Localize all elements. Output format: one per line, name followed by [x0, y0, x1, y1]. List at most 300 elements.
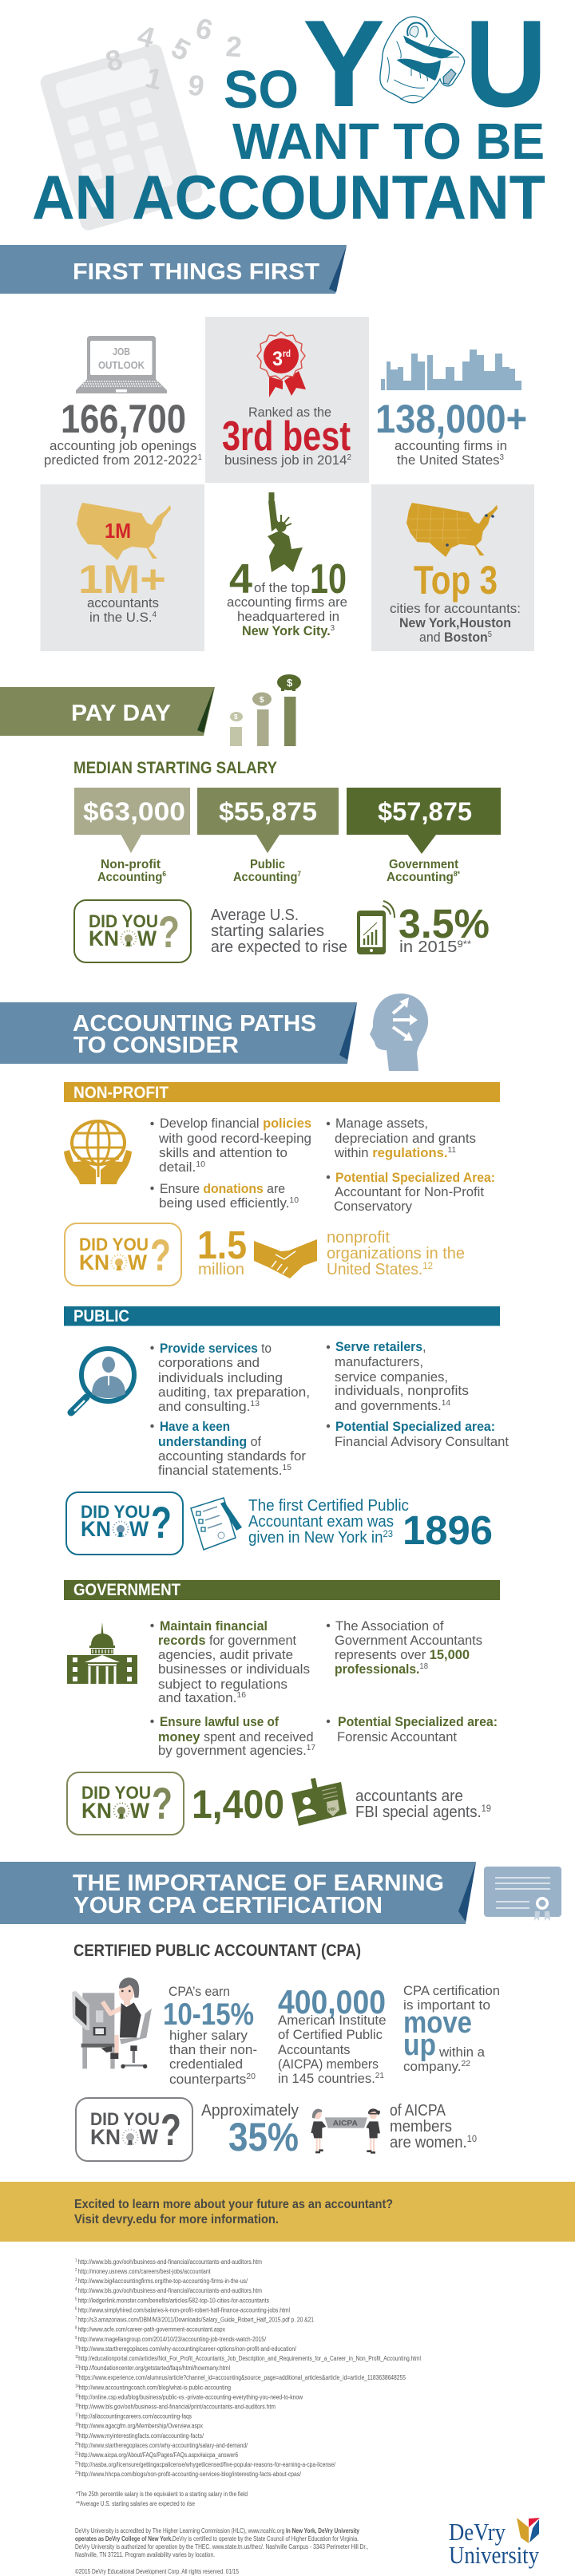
icon: calculator with floating digits: 9: [186, 68, 206, 103]
heading bar: government: GOVERNMENT: [73, 1581, 180, 1599]
icon: calculator with floating digits: 6: [192, 11, 216, 47]
text: public duties: Provide services to: [160, 1341, 272, 1356]
accreditation text: ©2015 DeVry Educational Development Corp. All rights reserved. 01/15: [75, 2568, 239, 2575]
text: FBI special agents: accountants are: [355, 1788, 463, 1805]
source references: 13: [75, 2374, 79, 2379]
panel: top ten firms in New York: headquartered in: [237, 609, 339, 624]
text: higher salary: CPA’s earn: [169, 1985, 230, 1999]
banner: pay day: [0, 687, 215, 736]
stat: 35 percent: [201, 2102, 299, 2159]
panel: one million accountants: in the U.S.: [89, 610, 153, 625]
text: government duties: Government Accountants: [335, 1634, 482, 1648]
text: public duties: [150, 1340, 509, 1478]
source references: http://www.acfe.com/career-path-government-accountant.aspx: [77, 2326, 225, 2333]
icon: head with arrows: [370, 994, 428, 1071]
panel: job openings: predicted from 2012-2022: [44, 452, 200, 468]
source references: http://www.startheregoplaces.com/why-accounting/salary-and-demand/: [79, 2442, 248, 2449]
heading bar: public: PUBLIC: [73, 1307, 129, 1326]
icon: handshake: [254, 1239, 317, 1278]
text: public duties: financial statements.: [158, 1464, 278, 1478]
did you know badge: non-profit: ?: [150, 1230, 171, 1280]
banner: first things first: [0, 245, 347, 294]
stat: 1,400: 1,400: [192, 1782, 284, 1827]
stat: 3.5 percent: 3.5%: [399, 901, 490, 946]
did you know badge: government: [67, 1772, 184, 1835]
source references: http://www.myinterestingfacts.com/accounting-facts/: [79, 2432, 204, 2440]
title: WANT TO BE: [232, 113, 545, 170]
accreditation text: Nashville, TN 37211. Program availability varies by location.: [75, 2551, 215, 2558]
text: government duties: by government agencies.: [158, 1744, 305, 1758]
text: move up within a company: company.: [403, 2060, 459, 2074]
icon: ribbon medal: 3: [272, 348, 283, 370]
text: government duties: 16: [236, 1691, 246, 1700]
text: higher salary: than their non-: [169, 2043, 257, 2057]
text: government duties: Maintain financial: [160, 1619, 268, 1634]
source references: 23: [75, 2471, 79, 2475]
text: non-profit duties: Ensure donations are: [160, 1182, 285, 1196]
text: move up within a company: 22: [462, 2060, 470, 2068]
text: nonprofit organizations: nonprofit: [327, 1229, 390, 1247]
source references: http://www.agacgfm.org/Membership/Overview.aspx: [79, 2423, 203, 2430]
source references: http://ledgerlink.monster.com/benefits/articles/582-top-10-cities-for-accountants: [78, 2297, 269, 2304]
icon: calculator with floating digits: 1: [142, 61, 165, 97]
heading bar: non-profit: NON-PROFIT: [73, 1084, 169, 1102]
did you know badge: pay day: W: [137, 926, 157, 950]
icon: FBI ID badge: [291, 1778, 347, 1826]
text: AICPA members: 400,000: [278, 1983, 386, 2021]
panel: top ten firms in New York: 10: [310, 556, 347, 603]
text: higher salary: counterparts: [169, 2072, 243, 2087]
icon: two women holding AICPA sign: [311, 2108, 380, 2154]
panel: top three cities: New York,Houston: [399, 615, 511, 630]
text: AICPA members are women: [390, 2102, 477, 2151]
banner: importance of CPA certification: YOUR CPA CERTIFICATION: [73, 1893, 383, 1918]
panel: top three cities: [371, 484, 534, 651]
panel: one million accountants: 4: [152, 610, 157, 619]
text: AICPA members: 21: [375, 2072, 384, 2080]
panel: top ten firms in New York: of the top: [254, 580, 310, 595]
icon: capitol building: [67, 1622, 137, 1684]
did you know badge: government: ?: [152, 1778, 172, 1828]
source references: http://www.accountingcoach.com/blog/what-is-public-accounting: [79, 2384, 231, 2391]
icon: US map with city dots: [406, 503, 498, 557]
icon: calculator with floating digits: 5: [166, 31, 196, 67]
source references: http://www.aicpa.org/About/FAQs/Pages/FAQs.aspx#aicpa_answer6: [79, 2452, 238, 2459]
heading bar: non-profit: [64, 1082, 500, 1102]
text: AICPA members are women: members: [390, 2118, 452, 2135]
text: government duties: represents over 15,000: [335, 1648, 470, 1662]
text: non-profit duties: detail.: [159, 1160, 194, 1175]
text: non-profit duties: 10: [196, 1160, 205, 1169]
panel: third best job: 2: [347, 453, 351, 462]
text: public duties: individuals including: [158, 1371, 283, 1385]
salary callout: non-profit: 6: [162, 870, 166, 878]
source references: 4: [75, 2287, 78, 2292]
panel: top three cities: and Boston: [419, 630, 491, 645]
panel: job openings: [44, 336, 202, 468]
text: public duties: and consulting.: [158, 1400, 247, 1414]
call to action band: Excited to learn more about your future as an accountant?: [74, 2198, 393, 2211]
panel: job openings: accounting job openings: [50, 438, 196, 453]
text: move up within a company: CPA certification: [403, 1984, 500, 1998]
salary callout: government: Government: [389, 858, 459, 871]
heading: median starting salary: MEDIAN STARTING SALARY: [73, 759, 277, 777]
text: move up within a company: within a: [438, 2045, 486, 2060]
text: move up within a company: move: [403, 2006, 472, 2040]
footnotes: **Average U.S. starting salaries are expected to rise: [76, 2500, 195, 2507]
did you know badge: non-profit: DID YOU: [79, 1235, 149, 1254]
text: starting salaries rise: are expected to rise: [211, 938, 347, 956]
text: non-profit duties: 10: [289, 1196, 299, 1205]
heading: certified public accountant: CERTIFIED PUBLIC ACCOUNTANT (CPA): [73, 1942, 361, 1960]
icon: globe in hands: [64, 1121, 132, 1184]
panel: one million accountants: accountants: [87, 595, 159, 610]
text: government duties: subject to regulations: [158, 1677, 288, 1692]
text: AICPA members: American Institute: [278, 2013, 387, 2028]
panel: job openings: 1: [198, 453, 202, 462]
source references: 8: [75, 2326, 77, 2331]
source references: http://www.bls.gov/ooh/business-and-financial/print/accountants-and-auditors.htm: [79, 2404, 276, 2410]
did you know badge: pay day: KN: [89, 926, 119, 950]
text: public duties: service companies,: [335, 1370, 448, 1385]
text: public duties: Potential Specialized area:: [335, 1420, 495, 1434]
text: government duties: Potential Specialized area:: [338, 1715, 498, 1729]
source references: 11: [75, 2355, 78, 2360]
icon: calculator with floating digits: 8: [102, 42, 125, 78]
panel: accounting firms: the United States: [397, 452, 501, 468]
text: higher salary: 10-15%: [163, 1997, 254, 2032]
source references: 9: [75, 2336, 78, 2341]
did you know badge: pay day: ?: [158, 907, 180, 957]
source references: 19: [75, 2432, 79, 2437]
title: AN ACCOUNTANT: [32, 162, 545, 232]
icon: bars with piggy banks: $: [260, 696, 264, 705]
did you know badge: CPA: DID YOU: [90, 2109, 160, 2129]
did you know badge: CPA: W: [139, 2125, 158, 2149]
text: government duties: 17: [307, 1744, 315, 1752]
text: public duties: 14: [442, 1399, 450, 1408]
text: public duties: Financial Advisory Consultant: [335, 1435, 509, 1449]
source references: 12: [75, 2365, 79, 2369]
source references: http://online.csp.edu/blog/business/public-vs.-private-accounting-everything-you-need-to-know: [79, 2393, 303, 2400]
text: AICPA members: in 145 countries.: [278, 2072, 375, 2086]
text: first CPA exam: 23: [383, 1528, 393, 1539]
text: first CPA exam: The first Certified Public: [248, 1497, 409, 1515]
icon: ribbon medal: rd: [283, 348, 291, 359]
text: higher salary: higher salary: [169, 2029, 248, 2043]
did you know badge: public: DID YOU: [81, 1502, 150, 1522]
text: AICPA members: Accountants: [278, 2043, 350, 2057]
text: nonprofit organizations: 12: [422, 1260, 433, 1271]
icon: calculator with floating digits: [38, 11, 243, 232]
banner: first things first: FIRST THINGS FIRST: [73, 259, 319, 285]
accreditation text: DeVry University is authorized for operation by the THEC. www.state.tn.us/thec/. Nashville Campus - 3343 Perimeter Hill Dr.,: [75, 2543, 368, 2550]
text: AICPA members are women: are women.: [390, 2134, 473, 2151]
icon: statue of liberty: [268, 492, 303, 572]
logo: DeVry University: DeVry: [449, 2518, 506, 2546]
text: nonprofit organizations: United States.: [327, 1261, 427, 1278]
source references: http://s3.amazonaws.com/DBM/M3/2011/Downloads/Salary_Guide_Robert_Half_2015.pdf p. 20 &21: [77, 2317, 314, 2324]
source references: 1: [75, 2258, 78, 2263]
salary callout: public: 7: [297, 870, 301, 878]
text: public duties: and governments.: [335, 1399, 440, 1413]
stat: 1.5 million: 1.5: [197, 1224, 247, 1267]
footnotes: [76, 2491, 248, 2507]
text: government duties: businesses or individuals: [158, 1662, 310, 1677]
text: public duties: Serve retailers,: [335, 1340, 426, 1354]
text: government duties: professionals.: [335, 1662, 419, 1677]
source references: 2: [75, 2268, 78, 2273]
panel: top ten firms in New York: New York City.: [242, 623, 331, 638]
panel: third best job: [205, 317, 369, 483]
source references: 5: [75, 2297, 78, 2301]
did you know badge: government: KN: [81, 1799, 112, 1823]
source references: 17: [75, 2413, 79, 2418]
accreditation text: [75, 2527, 368, 2575]
icon: bars with piggy banks: $: [234, 713, 238, 721]
banner: importance of CPA certification: THE IMPORTANCE OF EARNING: [73, 1871, 444, 1896]
did you know badge: CPA: [76, 2098, 192, 2161]
text: government duties: records for government: [158, 1634, 296, 1648]
source references: http://www.bls.gov/ooh/business-and-financial/accountants-and-auditors.htm: [78, 2287, 262, 2294]
text: non-profit duties: Accountant for Non-Profit: [335, 1185, 484, 1199]
icon: calculator with floating digits: 2: [224, 30, 243, 63]
text: public duties: manufacturers,: [335, 1355, 423, 1369]
text: higher salary: 20: [246, 2072, 256, 2081]
panel: job openings: 166,700: [61, 397, 186, 441]
icon: ribbon medal: [257, 332, 306, 397]
icon: laptop job outlook: [76, 336, 167, 393]
text: FBI special agents: 19: [482, 1803, 491, 1814]
text: government duties: money spent and received: [158, 1730, 313, 1744]
icon: city skyline: [381, 350, 521, 390]
text: government duties: agencies, audit private: [158, 1648, 293, 1662]
text: public duties: auditing, tax preparation,: [158, 1385, 310, 1400]
icon: pointing hand: [380, 17, 465, 103]
text: starting salaries rise: starting salaries: [211, 923, 324, 940]
icon: US map: [77, 503, 171, 560]
panel: top ten firms in New York: accounting firms are: [227, 595, 347, 610]
salary callout: non-profit: [74, 788, 190, 884]
stat: 1896: 1896: [402, 1507, 493, 1553]
text: non-profit duties: within regulations.: [335, 1146, 447, 1160]
icon: two women holding AICPA sign: AICPA: [333, 2120, 358, 2128]
text: first CPA exam: Accountant exam was: [248, 1513, 394, 1531]
source references: 15: [75, 2393, 79, 2398]
source references: [75, 2258, 421, 2478]
panel: top ten firms in New York: [227, 492, 347, 638]
text: government duties: [150, 1619, 498, 1758]
source references: 18: [75, 2423, 79, 2428]
source references: 20: [75, 2442, 79, 2447]
panel: top three cities: Top 3: [414, 558, 498, 603]
banner: pay day: PAY DAY: [71, 701, 171, 726]
did you know badge: public: ?: [151, 1497, 172, 1547]
panel: one million accountants: 1M: [105, 519, 131, 543]
accreditation text: operates as DeVry College of New York.DeVry is certified to operate by the State Council of Higher Education for Virginia.: [75, 2535, 359, 2542]
stat: 1.5 million: million: [198, 1261, 244, 1278]
source references: http://allaccountingcareers.com/accounting-faqs: [79, 2413, 192, 2420]
stat: 35 percent: Approximately: [201, 2102, 299, 2120]
text: starting salaries rise: Average U.S.: [211, 907, 299, 924]
salary callout: non-profit: $63,000: [83, 797, 185, 826]
banner: accounting paths: [0, 1002, 357, 1064]
did you know badge: public: W: [129, 1517, 149, 1541]
source references: 10: [75, 2345, 79, 2350]
icon: woman working at desk: [72, 1977, 152, 2068]
source references: http://www.big4accountingfirms.org/the-top-accounting-firms-in-the-us/: [78, 2278, 248, 2285]
text: AICPA members: of Certified Public: [278, 2028, 383, 2042]
text: AICPA members: [278, 1983, 387, 2086]
source references: http://www.bls.gov/ooh/business-and-financial/accountants-and-auditors.htm: [78, 2258, 262, 2266]
text: government duties: Ensure lawful use of: [160, 1715, 279, 1729]
source references: 14: [75, 2384, 79, 2388]
text: government duties: and taxation.: [158, 1691, 233, 1705]
text: non-profit duties: Manage assets,: [335, 1116, 428, 1131]
text: move up within a company: up: [403, 2029, 436, 2062]
panel: top ten firms in New York: 3: [331, 624, 335, 633]
did you know badge: public: [66, 1492, 183, 1555]
text: FBI special agents: FBI special agents.: [355, 1804, 491, 1821]
text: non-profit duties: 11: [448, 1146, 456, 1155]
source references: http://educationportal.com/articles/Not_For_Profit_Accountants_Job_Description_and_Requirements_for_a_Career_in_Non_Profit_Accounting.html: [78, 2355, 421, 2362]
source references: 6: [75, 2306, 78, 2311]
text: non-profit duties: Develop financial policies: [160, 1116, 311, 1131]
text: AICPA members: (AICPA) members: [278, 2057, 379, 2072]
icon: certificate with seal: [484, 1867, 561, 1921]
panel: accounting firms: 138,000+: [375, 397, 527, 441]
footnotes: *The 25th percentile salary is the equivalent to a starting salary in the field: [76, 2491, 248, 2498]
text: government duties: 18: [419, 1662, 428, 1671]
text: AICPA members are women: 10: [467, 2133, 477, 2144]
text: nonprofit organizations: [327, 1229, 465, 1278]
icon: FBI ID badge: FBI: [328, 1807, 336, 1813]
panel: third best job: 3rd best: [222, 413, 351, 460]
text: non-profit duties: with good record-keeping: [158, 1132, 311, 1146]
salary callout: non-profit: Accounting: [97, 871, 168, 884]
icon: exam paper and pencil: [191, 1498, 242, 1550]
text: public duties: 13: [250, 1400, 260, 1409]
panel: third best job: Ranked as the: [248, 405, 331, 420]
text: non-profit duties: depreciation and grants: [335, 1132, 476, 1146]
source references: 16: [75, 2404, 79, 2408]
source references: 22: [75, 2461, 79, 2466]
text: public duties: understanding of: [158, 1435, 261, 1449]
did you know badge: pay day: DID YOU: [89, 911, 158, 931]
icon: laptop job outlook: JOB: [113, 346, 130, 358]
text: AICPA members are women: of AICPA: [390, 2102, 446, 2120]
source references: http://www.hhcpa.com/blogs/non-profit-accounting-services-blog/interesting-facts-about-cpas/: [79, 2471, 302, 2478]
text: non-profit duties: skills and attention to: [159, 1146, 288, 1160]
salary callout: government: [347, 788, 501, 884]
accreditation text: DeVry University is accredited by The Higher Learning Commission (HLC), www.ncahlc.org In New York, DeVry University: [75, 2527, 359, 2535]
source references: https://www.experience.com/alumnus/article?channel_id=accounting&source_page=additional_articles&article_id=article_1183638648255: [79, 2374, 406, 2381]
icon: smartphone with rising chart: [357, 901, 395, 954]
source references: http://www.simplyhired.com/salaries-k-non-profit-robert-half-finance-accounting-jobs.html: [78, 2306, 290, 2314]
banner: accounting paths: ACCOUNTING PATHS: [73, 1011, 316, 1037]
salary callout: government: $57,875: [378, 797, 472, 826]
text: first CPA exam: given in New York in: [248, 1529, 392, 1547]
text: government duties: The Association of: [335, 1619, 444, 1634]
panel: one million accountants: 1M+: [78, 557, 166, 602]
text: non-profit duties: Conservatory: [334, 1199, 413, 1214]
did you know badge: non-profit: KN: [79, 1250, 109, 1274]
panel: top three cities: cities for accountants:: [390, 601, 521, 616]
text: public duties: accounting standards for: [158, 1449, 307, 1464]
heading bar: government: [64, 1580, 500, 1600]
source references: http://foundationcenter.org/getstarted/faqs/html/howmany.html: [79, 2365, 230, 2372]
logo: DeVry University: [449, 2518, 540, 2569]
call to action band: [0, 2182, 575, 2242]
source references: http://money.usnews.com/careers/best-jobs/accountant: [78, 2268, 211, 2275]
source references: http://www.magellangroup.com/2014/10/23/accounting-job-trends-watch-2015/: [78, 2336, 267, 2343]
did you know badge: non-profit: W: [128, 1250, 147, 1274]
did you know badge: CPA: ?: [161, 2104, 181, 2155]
did you know badge: non-profit: [65, 1223, 181, 1286]
source references: 21: [75, 2452, 79, 2456]
text: public duties: corporations and: [158, 1356, 260, 1370]
panel: accounting firms: [375, 350, 527, 468]
text: public duties: individuals, nonprofits: [335, 1384, 469, 1398]
salary callout: public: Accounting: [233, 871, 303, 884]
salary callout: public: Public: [250, 858, 285, 871]
stat: 35 percent: 35%: [228, 2115, 299, 2159]
panel: top ten firms in New York: 4: [229, 556, 252, 603]
panel: accounting firms: 3: [500, 453, 504, 462]
icon: magnifier over person: [71, 1349, 134, 1412]
stat: 3.5 percent: 9**: [457, 938, 471, 950]
icon: bars with piggy banks: $: [287, 677, 293, 689]
icon: bars with piggy banks: [230, 674, 301, 746]
text: higher salary: credentialed: [169, 2057, 243, 2072]
salary callout: public: [197, 788, 339, 884]
source references: http://www.startheregoplaces.com/why-accounting/career-options/non-profit-and-education/: [79, 2345, 297, 2353]
source references: 7: [75, 2317, 77, 2321]
did you know badge: CPA: KN: [90, 2125, 121, 2149]
text: public duties: Have a keen: [160, 1420, 230, 1434]
text: public duties: 15: [282, 1464, 291, 1472]
title: [32, 0, 547, 232]
panel: third best job: business job in 2014: [224, 452, 348, 468]
panel: accounting firms: accounting firms in: [395, 438, 507, 453]
salary callout: non-profit: Non-profit: [101, 858, 161, 871]
call to action band: Visit devry.edu for more information.: [74, 2213, 279, 2226]
panel: one million accountants: [40, 484, 204, 651]
icon: laptop job outlook: OUTLOOK: [98, 359, 145, 371]
text: starting salaries rise: [211, 907, 347, 956]
banner: importance of CPA certification: [0, 1862, 476, 1924]
salary callout: government: 8*: [454, 870, 460, 878]
did you know badge: government: DID YOU: [81, 1783, 151, 1803]
source references: http://nasba.org/licensure/gettingacpalicense/whygetlicensed/five-popular-reasons-for-earning-a-cpa-license/: [79, 2461, 336, 2468]
text: nonprofit organizations: organizations in the: [327, 1245, 465, 1262]
source references: 3: [75, 2278, 78, 2282]
text: government duties: Forensic Accountant: [337, 1730, 457, 1744]
did you know badge: government: W: [130, 1799, 149, 1823]
text: non-profit duties: [150, 1116, 495, 1214]
heading bar: public: [64, 1306, 500, 1326]
did you know badge: public: KN: [81, 1517, 111, 1541]
text: higher salary: [163, 1985, 257, 2087]
text: non-profit duties: Potential Specialized Area:: [335, 1171, 495, 1185]
text: first CPA exam: [248, 1497, 409, 1547]
banner: accounting paths: TO CONSIDER: [73, 1033, 239, 1058]
logo: DeVry University: University: [449, 2541, 539, 2569]
stat: 3.5 percent: in 2015: [399, 938, 452, 956]
salary callout: public: $55,875: [219, 797, 317, 826]
icon: calculator with floating digits: 4: [134, 18, 158, 54]
title: SO: [224, 60, 299, 120]
